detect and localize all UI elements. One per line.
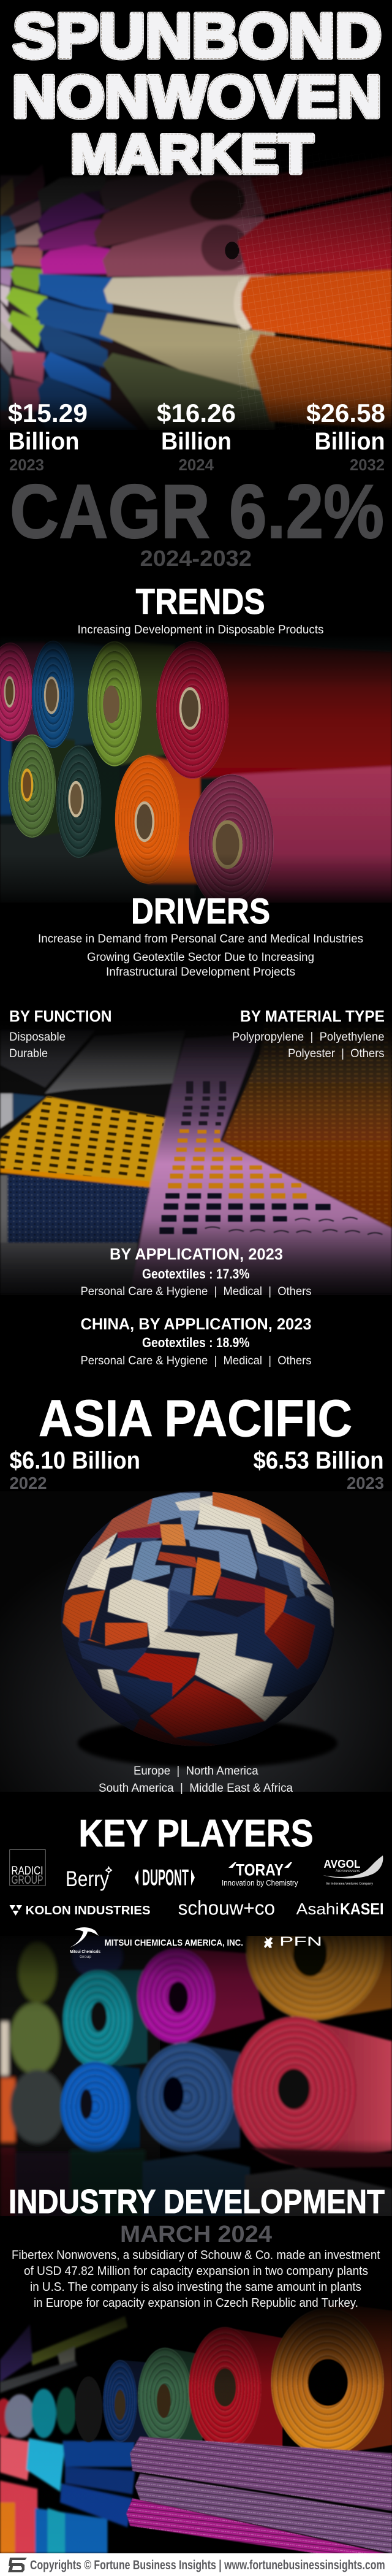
segment: by application [81,1245,311,1298]
logo: Radici Group: RADICI [11,1865,43,1878]
market value 2032: 2032 [350,456,385,474]
logo: Mitsui Chemicals: MITSUI CHEMICALS AMERICA, INC. [105,1938,243,1948]
footer [0,2553,392,2576]
title: NONWOVEN [12,64,382,130]
segment: by material type [232,1007,385,1060]
segment: china by application: CHINA, BY APPLICATION, 2023 [81,1315,311,1333]
title: NONWOVEN [12,64,382,130]
trends heading [77,582,323,636]
date: MARCH 2024 [120,2222,272,2247]
market value 2023: $15.29 [8,399,88,427]
segment: by function [9,1007,111,1060]
industry photo 1: soft fabric rolls [0,1936,392,2216]
title: NONWOVEN [12,64,382,130]
industry photo 2: rolls on shelves [0,2294,392,2555]
market value 2023: Billion [9,428,80,455]
logo: Avgol [323,1856,383,1886]
drivers heading and text: Increase in Demand from Personal Care and Medical Industries [38,933,363,946]
logo: Kolon Industries: KOLON INDUSTRIES [26,1904,151,1917]
title [12,1,382,185]
asia pacific heading and values: $6.53 Billion [254,1447,383,1474]
logo: Berry: Berry [66,1867,109,1891]
market value 2023 [8,399,88,474]
segment: by material type: Polyester | Others [288,1047,385,1060]
woven fabric ball [60,1489,337,1768]
logo: Avgol: AVGOL [323,1858,360,1870]
trends heading: TRENDS [136,582,265,622]
other regions [99,1765,293,1795]
background glow behind woven ball [0,1491,392,1792]
segment: by material type: BY MATERIAL TYPE [240,1007,385,1025]
trends heading: Increasing Development in Disposable Products [77,624,323,636]
logo: Asahi Kasei [296,1900,383,1918]
hero photo: stacked fabric rolls [0,148,392,430]
logo: PFN: PFN [279,1935,322,1949]
market value 2032 [306,399,385,474]
asia pacific heading and values: ASIA PACIFIC [39,1389,352,1447]
segment: china by application: Geotextiles : 18.9% [142,1335,250,1350]
segment: by application: BY APPLICATION, 2023 [110,1245,283,1263]
logo: Toray [222,1860,298,1887]
logo: Radici Group [10,1849,45,1887]
title: MARKET [70,124,313,185]
market value 2024: $16.26 [157,399,236,427]
drivers heading and text: DRIVERS [131,892,270,931]
title: SPUNBOND [13,1,382,71]
segment: by application: Personal Care & Hygiene | Medical | Others [81,1285,311,1298]
asia pacific heading and values: 2023 [347,1473,384,1492]
logo: DuPont [135,1865,195,1890]
asia pacific heading and values [10,1389,384,1492]
market value 2024: Billion [161,428,232,455]
drivers heading and text: Growing Geotextile Sector Due to Increasing [87,951,314,964]
market value 2024: 2024 [179,456,214,474]
asia pacific heading and values: $6.10 Billion [10,1447,140,1474]
market value 2032: $26.58 [306,399,385,427]
logo: Mitsui Chemicals [70,1927,243,1959]
logo: DuPont: DUPONT [142,1865,189,1890]
logo: Mitsui Chemicals: Group [80,1955,91,1959]
development text block: in U.S. The company is also investing the same amount in plants [30,2280,361,2294]
logo: Avgol: Nonwovens [336,1869,361,1873]
segment: china by application: Personal Care & Hygiene | Medical | Others [81,1355,311,1367]
development text block [12,2248,380,2310]
title: MARKET [70,124,313,185]
segment: by application: Geotextiles : 17.3% [142,1266,250,1282]
development text block: of USD 47.82 Million for capacity expansion in two company plants [24,2264,368,2278]
logo: Asahi Kasei: KASEI [340,1900,383,1918]
drivers heading and text: Infrastructural Development Projects [106,966,295,979]
logo: Schouw + Co: schouw+co [178,1897,275,1919]
trends photo: fabric rolls [0,640,392,903]
logo: Asahi Kasei: Asahi [296,1900,339,1918]
logo: PFN [264,1935,322,1949]
logo: Avgol: An Indorama Ventures Company [326,1882,374,1886]
market value 2032: Billion [315,428,385,455]
other regions: South America | Middle East & Africa [99,1782,293,1795]
market value 2023: 2023 [9,456,44,474]
other regions: Europe | North America [134,1765,258,1778]
drivers heading and text [38,892,363,979]
logo: Toray: Innovation by Chemistry [222,1879,298,1887]
market value 2024 [157,399,236,474]
title: SPUNBOND [13,1,382,71]
title: SPUNBOND [13,1,382,71]
title: MARKET [70,124,313,185]
key players heading: KEY PLAYERS [78,1813,314,1855]
segment: by function: Disposable [9,1031,66,1044]
CAGR: 2024-2032 [140,546,252,571]
development text block: in Europe for capacity expansion in Czech Republic and Turkey. [34,2296,358,2310]
asia pacific heading and values: 2022 [10,1473,47,1492]
segment: by function: BY FUNCTION [9,1007,111,1025]
logo: Radici Group: GROUP [11,1874,43,1887]
segment: china by application [81,1315,311,1367]
segment: by function: Durable [9,1047,48,1060]
logo: Mitsui Chemicals: Mitsui Chemicals [70,1949,100,1954]
segmentation photo: perforated sheets [0,1018,392,1294]
logo: Toray: TORAY [236,1860,284,1879]
segment: by material type: Polypropylene | Polyethylene [232,1031,385,1044]
